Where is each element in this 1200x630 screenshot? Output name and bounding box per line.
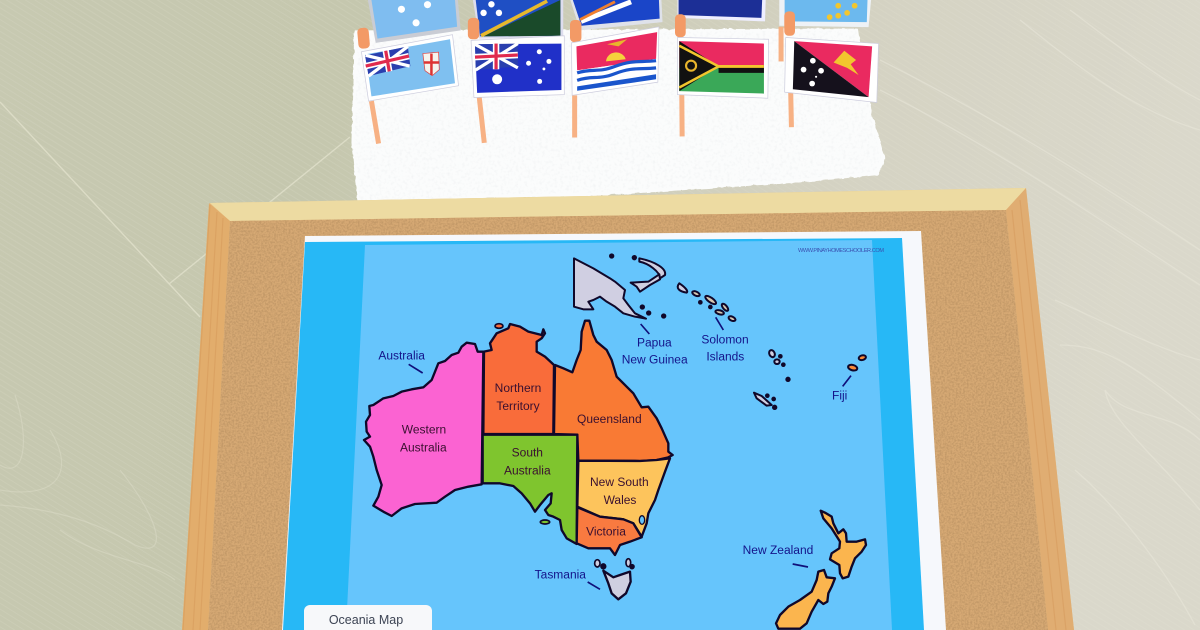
- printed map sheet: [282, 231, 946, 630]
- Western Australia: Australia: [400, 441, 447, 455]
- New Zealand: New Zealand: [743, 543, 813, 557]
- Western Australia: [364, 343, 483, 516]
- styrofoam block: [351, 29, 885, 209]
- styrofoam block with flags: [351, 0, 885, 209]
- Papua New Guinea: Papua: [637, 335, 672, 349]
- watermark: WWW.PINAYHOMESCHOOLER.COM: [798, 248, 884, 254]
- bright blue border: [283, 238, 924, 630]
- Tasmania label: [535, 568, 600, 589]
- Fiji: [832, 354, 866, 403]
- back row flags: [368, 0, 871, 43]
- Northern Territory: Territory: [496, 399, 540, 413]
- Northern Territory: [483, 324, 554, 434]
- Papua New Guinea: New Guinea: [622, 353, 688, 367]
- Queensland: Queensland: [577, 412, 642, 426]
- Victoria: Victoria: [586, 524, 626, 538]
- wooden frame: [182, 188, 1074, 630]
- South Australia: Australia: [504, 463, 551, 477]
- flag: Kiribati: [570, 20, 659, 137]
- Melville Island: [495, 324, 503, 328]
- Pacific islands: [574, 253, 866, 410]
- Solomon Islands: Islands: [706, 350, 744, 364]
- Queensland: [554, 321, 673, 461]
- New South Wales: [577, 458, 670, 537]
- cork surface: [208, 210, 1048, 630]
- Vanuatu islands: [754, 349, 791, 410]
- Tasmania label: Tasmania: [535, 568, 586, 582]
- light blue ocean: [346, 240, 892, 630]
- Northern Territory: Northern: [495, 381, 541, 395]
- New Zealand: [743, 511, 866, 629]
- Oceania Map title label: Oceania Map: [329, 613, 403, 627]
- Fiji: Fiji: [832, 389, 847, 403]
- South Australia: [483, 435, 577, 544]
- flag: Fiji: [357, 27, 459, 144]
- flag: Vanuatu: [675, 14, 769, 136]
- flag: Australia: [468, 18, 564, 143]
- Tasmania: [595, 559, 634, 599]
- Solomon Islands: Solomon: [701, 333, 749, 347]
- Solomon Islands: [678, 283, 749, 364]
- Western Australia: Western: [402, 423, 446, 437]
- South Australia: South: [512, 445, 543, 459]
- corkboard: [182, 188, 1074, 630]
- Oceania Map title label: [304, 605, 432, 630]
- flag: Papua New Guinea: [781, 11, 879, 127]
- New South Wales: Wales: [604, 493, 636, 507]
- white paper: [282, 231, 946, 630]
- Papua New Guinea: [574, 253, 688, 367]
- New South Wales: New South: [590, 475, 649, 489]
- Australia label: [378, 348, 425, 373]
- Victoria: [577, 507, 642, 555]
- Australia map: [364, 321, 673, 599]
- Australia label: Australia: [378, 348, 425, 362]
- Kangaroo Island: [540, 520, 550, 524]
